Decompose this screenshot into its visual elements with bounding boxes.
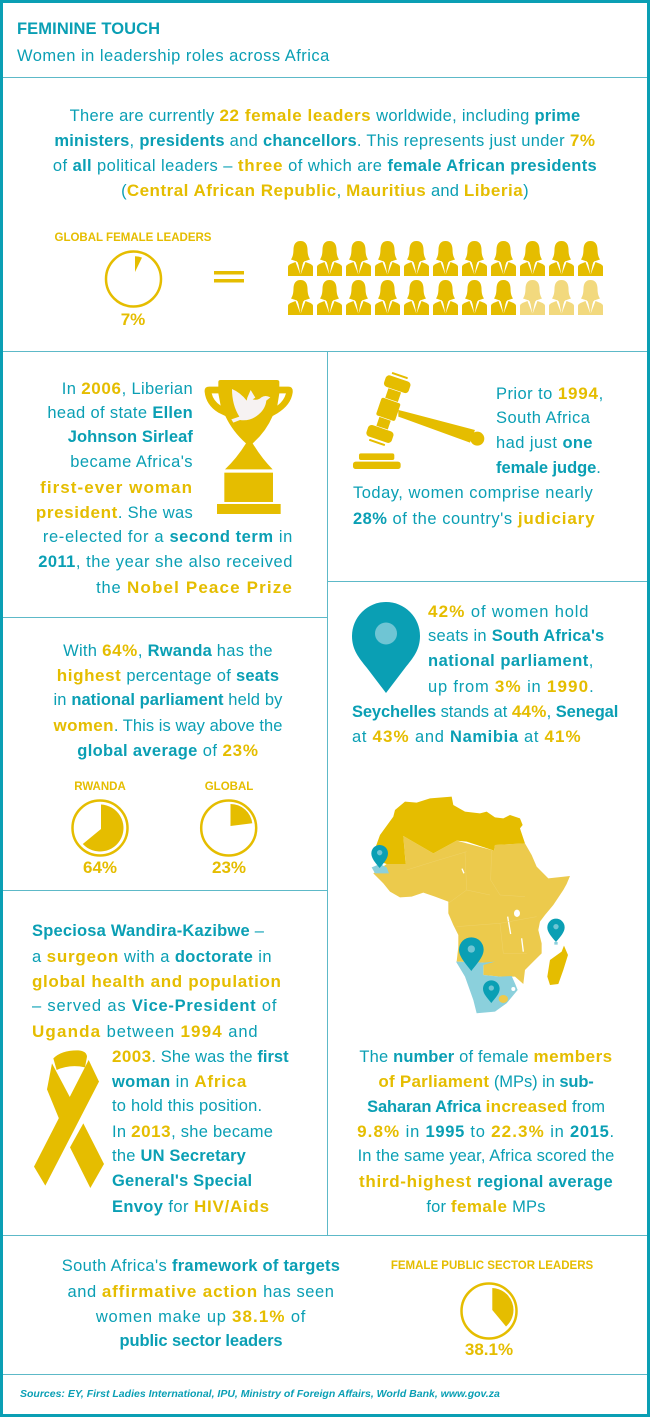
title: FEMININE TOUCH: [17, 20, 160, 38]
text: parliament seats in South Africa: 42% of women hold: [428, 602, 589, 621]
intro text: [53, 106, 597, 200]
text: public sector leaders: [62, 1257, 340, 1350]
intro text: There are currently 22 female leaders worldwide, including prime: [70, 106, 580, 125]
text: South Africa judiciary: 28% of the country's judiciary: [353, 509, 595, 528]
text: Ellen Johnson Sirleaf: the Nobel Peace Prize: [96, 578, 293, 597]
text: female MPs in sub-Saharan Africa: [357, 1047, 615, 1216]
text: Ellen Johnson Sirleaf: 2011, the year she also received: [38, 553, 293, 571]
text: Speciosa Wandira-Kazibwe: Speciosa Wandira-Kazibwe –: [32, 922, 264, 940]
label: female public sector leaders: FEMALE PUBLIC SECTOR LEADERS: [391, 1260, 593, 1272]
text: Ellen Johnson Sirleaf: re-elected for a second term in: [43, 528, 293, 546]
text: Speciosa Wandira-Kazibwe: Envoy for HIV/Aids: [112, 1197, 270, 1216]
sources: Sources: EY, First Ladies International, IPU, Ministry of Foreign Affairs, World Bank, www.gov.za: [20, 1388, 500, 1400]
text: female MPs in sub-Saharan Africa: In the same year, Africa scored the: [358, 1147, 614, 1165]
text: Speciosa Wandira-Kazibwe: 2003. She was the first: [112, 1047, 289, 1066]
text: Speciosa Wandira-Kazibwe: – served as Vice-President of: [32, 997, 277, 1015]
text: public sector leaders: women make up 38.1% of: [96, 1307, 306, 1326]
text: Rwanda: women. This is way above the: [54, 716, 282, 735]
text: female MPs in sub-Saharan Africa: The number of female members: [359, 1047, 613, 1066]
text: female MPs in sub-Saharan Africa: for female MPs: [426, 1197, 546, 1216]
text: Ellen Johnson Sirleaf: president. She was: [36, 503, 193, 522]
text: female MPs in sub-Saharan Africa: of Parliament (MPs) in sub-: [378, 1072, 594, 1091]
value: 64%: 64%: [83, 858, 117, 877]
text: South Africa judiciary: Today, women comprise nearly: [353, 484, 593, 502]
text: Rwanda: global average of 23%: [77, 741, 259, 760]
text: Speciosa Wandira-Kazibwe: woman in Africa: [112, 1072, 247, 1091]
value: 7%: 7%: [121, 310, 145, 329]
text: female MPs in sub-Saharan Africa: third-highest regional average: [359, 1172, 613, 1191]
text: South Africa judiciary: Prior to 1994,: [496, 384, 604, 403]
label: global: GLOBAL: [205, 781, 253, 793]
text: parliament seats in South Africa: up from 3% in 1990.: [428, 677, 595, 696]
text: Speciosa Wandira-Kazibwe: [32, 922, 289, 1216]
text: public sector leaders: South Africa's framework of targets: [62, 1257, 340, 1275]
text: parliament seats in South Africa: national parliament,: [428, 652, 594, 670]
text: South Africa judiciary: had just one: [496, 434, 593, 452]
text: Ellen Johnson Sirleaf: In 2006, Liberian: [62, 379, 193, 398]
value: 38.1%: 38.1%: [465, 1340, 513, 1359]
text: Speciosa Wandira-Kazibwe: Uganda between 1994 and: [32, 1022, 258, 1041]
value: 23%: 23%: [212, 858, 246, 877]
text: public sector leaders: public sector leaders: [120, 1332, 282, 1350]
intro text: of all political leaders – three of which are female African presidents: [53, 156, 597, 175]
text: parliament seats in South Africa: [352, 602, 618, 746]
text: Rwanda: in national parliament held by: [53, 691, 283, 709]
text: female MPs in sub-Saharan Africa: 9.8% in 1995 to 22.3% in 2015.: [357, 1122, 615, 1141]
text: South Africa judiciary: South Africa: [496, 409, 590, 427]
text: Speciosa Wandira-Kazibwe: to hold this position.: [112, 1097, 262, 1115]
text: Rwanda: highest percentage of seats: [57, 666, 279, 685]
intro text: ministers, presidents and chancellors. This represents just under 7%: [54, 131, 596, 150]
text: Ellen Johnson Sirleaf: head of state Ellen: [47, 404, 193, 422]
text: Rwanda: With 64%, Rwanda has the: [63, 641, 273, 660]
text: Speciosa Wandira-Kazibwe: the UN Secretary: [112, 1147, 246, 1165]
label: global female leaders: GLOBAL FEMALE LEADERS: [55, 232, 211, 244]
text: Ellen Johnson Sirleaf: [36, 379, 293, 597]
text: female MPs in sub-Saharan Africa: Saharan Africa increased from: [367, 1097, 605, 1116]
text: Speciosa Wandira-Kazibwe: In 2013, she became: [112, 1122, 273, 1141]
text: Ellen Johnson Sirleaf: first-ever woman: [40, 478, 193, 497]
text: Speciosa Wandira-Kazibwe: global health and population: [32, 972, 282, 991]
text: South Africa judiciary: [353, 384, 604, 528]
text: parliament seats in South Africa: Seychelles stands at 44%, Senegal: [352, 702, 618, 721]
label: Rwanda: RWANDA: [74, 781, 126, 793]
text: Rwanda: [53, 641, 283, 760]
text: parliament seats in South Africa: seats in South Africa's: [428, 627, 604, 645]
subtitle: Women in leadership roles across Africa: [17, 47, 330, 65]
text: public sector leaders: and affirmative action has seen: [68, 1282, 334, 1301]
text: Ellen Johnson Sirleaf: became Africa's: [70, 453, 193, 471]
intro text: (Central African Republic, Mauritius and Liberia): [121, 181, 529, 200]
text: parliament seats in South Africa: at 43% and Namibia at 41%: [352, 727, 582, 746]
text: South Africa judiciary: female judge.: [496, 459, 601, 477]
text: Speciosa Wandira-Kazibwe: a surgeon with a doctorate in: [32, 947, 272, 966]
text: Speciosa Wandira-Kazibwe: General's Special: [112, 1172, 252, 1190]
text: Ellen Johnson Sirleaf: Johnson Sirleaf: [68, 428, 193, 446]
